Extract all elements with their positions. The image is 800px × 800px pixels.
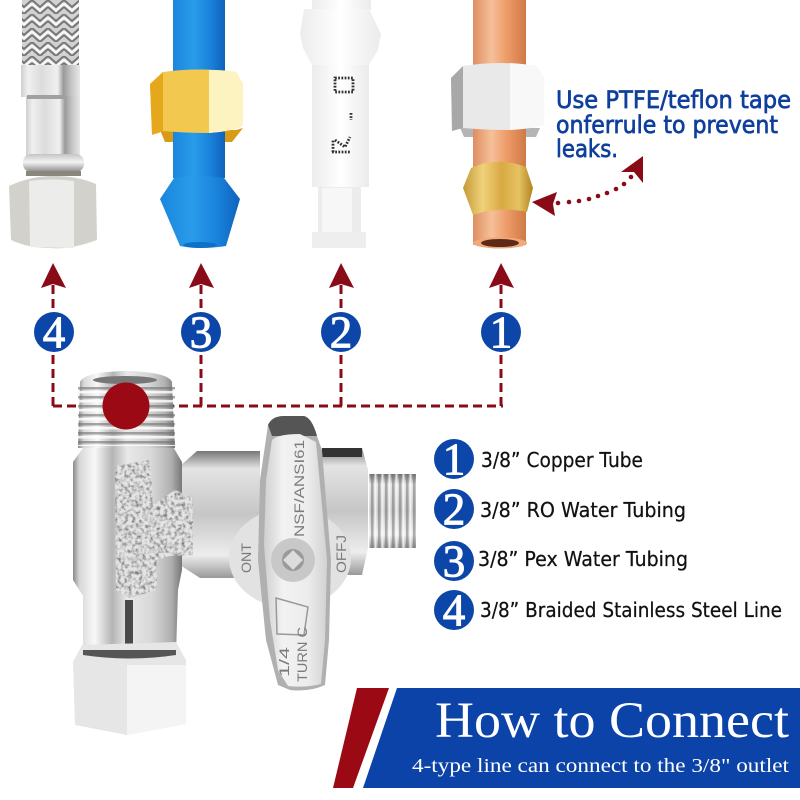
angle stop valve — [73, 371, 416, 735]
banner: how to connect — [333, 688, 800, 788]
legend item 4 — [434, 586, 782, 636]
number badge 2 — [321, 308, 361, 358]
legend item 1: 3/8” Copper Tube — [481, 448, 643, 472]
legend item 2 — [434, 484, 686, 534]
legend item 3: 3/8” Pex Water Tubing — [478, 547, 688, 571]
side outlet arm — [180, 448, 416, 578]
braided stainless steel line — [9, 0, 97, 248]
legend item 4: 3/8” Braided Stainless Steel Line — [480, 598, 782, 622]
quarter-turn handle: OFFJ — [333, 535, 349, 573]
connection lines and arrows — [41, 263, 514, 406]
number badge 2: 2 — [330, 308, 352, 358]
legend — [434, 434, 782, 636]
quarter-turn handle: NSF/ANSI61 — [291, 440, 307, 537]
legend item 2: 2 — [443, 484, 465, 534]
legend item 1: 1 — [443, 434, 465, 484]
rotary disc — [229, 508, 351, 608]
legend item 3 — [434, 536, 688, 586]
number badge 4: 4 — [43, 308, 65, 358]
legend item 1 — [434, 434, 643, 484]
valve body — [73, 445, 193, 655]
number badge 4 — [34, 308, 74, 358]
number badge 1: 1 — [490, 308, 512, 358]
callout: ptfe tape: Use PTFE/teflon tape — [556, 86, 791, 114]
white ro water tubing — [300, 0, 381, 248]
quarter-turn handle: 1/4 — [276, 647, 292, 677]
legend item 2: 3/8” RO Water Tubing — [480, 498, 686, 522]
hex nut — [73, 642, 186, 735]
threaded inlet — [78, 371, 175, 448]
number badge 3 — [181, 308, 221, 358]
blue pex water tubing — [150, 0, 243, 248]
copper tube — [451, 0, 544, 248]
number badge 3: 3 — [190, 308, 212, 358]
banner subtitle: 4-type line can connect to the 3/8" outlet — [412, 755, 789, 777]
legend item 3: 3 — [443, 536, 465, 586]
quarter-turn handle: ONT — [238, 543, 254, 573]
legend item 4: 4 — [443, 586, 465, 636]
red centre dot — [102, 382, 150, 430]
double arrow to ferrule — [532, 156, 643, 216]
brass ferrule — [463, 162, 533, 215]
callout: ptfe tape — [556, 86, 791, 163]
callout: ptfe tape: onferrule to prevent — [556, 111, 778, 139]
banner title: How to Connect — [435, 693, 789, 749]
number badge 1 — [481, 308, 521, 358]
quarter-turn handle: TURN C — [294, 627, 310, 682]
quarter-turn handle — [238, 416, 349, 690]
printed marking on tube — [332, 78, 353, 152]
callout: ptfe tape: leaks. — [556, 135, 618, 163]
